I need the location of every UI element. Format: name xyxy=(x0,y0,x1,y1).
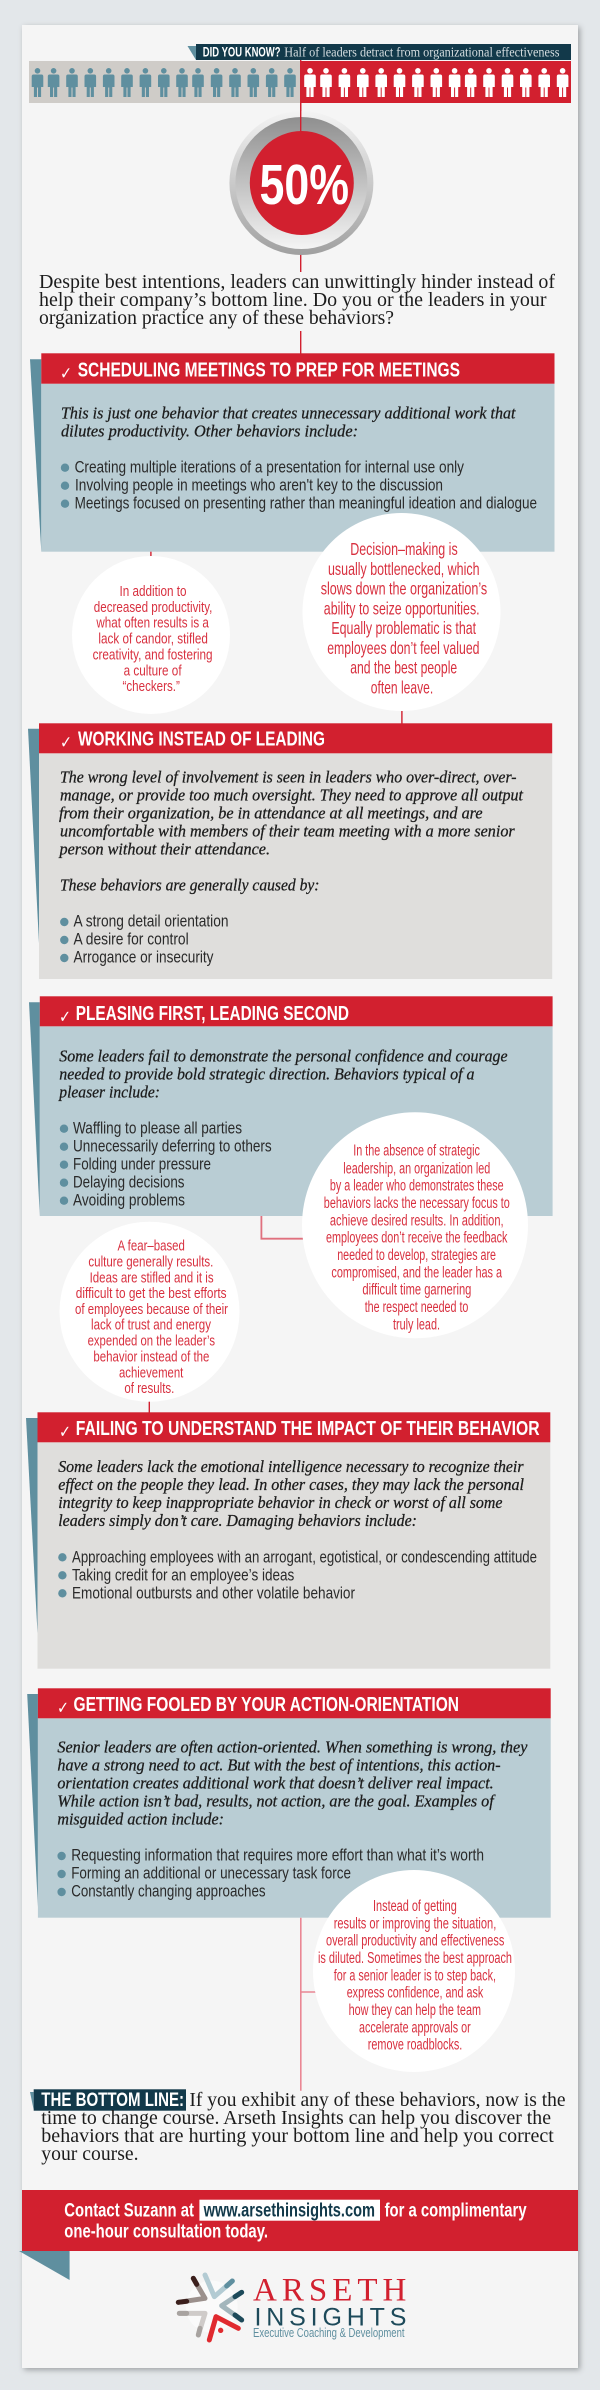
bullet list: Constantly changing approaches xyxy=(71,1883,266,1901)
contact banner: one-hour consultation today. xyxy=(64,2221,268,2242)
callout: instead of getting results xyxy=(313,1870,515,2072)
callout: absence of strategic leadership: employees don’t receive the feedback xyxy=(326,1230,508,1247)
intro text: Despite best intentions, leaders can unwittingly hinder instead of xyxy=(39,272,556,293)
people strip: half of leaders xyxy=(29,61,571,103)
bullet list: Emotional outbursts and other volatile behavior xyxy=(72,1584,355,1602)
heading: pleasing first: ✓ xyxy=(59,1008,71,1028)
connector lines xyxy=(301,1918,316,2091)
callout: decision-making xyxy=(302,513,500,711)
bullet list: Involving people in meetings who aren't key to the discussion xyxy=(75,476,443,494)
callout: absence of strategic leadership: behaviors lacks the necessary focus to xyxy=(324,1195,510,1212)
bullet list: Arrogance or insecurity xyxy=(74,949,214,967)
callout: fear-based culture: Ideas are stifled and it is xyxy=(90,1270,214,1286)
heading: action orientation: ✓ xyxy=(57,1698,69,1718)
logo wordmark: INSIGHTS xyxy=(254,2304,406,2332)
callout: fear-based culture xyxy=(60,1222,240,1402)
bullet list xyxy=(58,1548,537,1602)
callout: absence of strategic leadership: difficult time garnering xyxy=(362,1282,471,1299)
50 percent badge xyxy=(229,60,373,272)
text: involvement: uncomfortable with members of their team meeting with a more senior xyxy=(60,822,515,841)
callout: absence of strategic leadership: needed to develop, strategies are xyxy=(337,1247,496,1264)
text: action xyxy=(57,1738,528,1829)
text: intro: This is just one behavior that creates unnecessary additional work that xyxy=(61,403,517,422)
bullet list: Avoiding problems xyxy=(73,1191,185,1209)
callout: instead of getting results: Instead of getting xyxy=(373,1898,457,1915)
callout: instead of getting results: how they can help the team xyxy=(349,2002,481,2019)
bullet list: Requesting information that requires more effort than what it’s worth xyxy=(71,1847,484,1865)
logo: Arseth Insights xyxy=(178,2273,406,2340)
text: emotional intelligence xyxy=(58,1457,524,1530)
text: involvement: from their organization, be in attendance at all meetings, and are xyxy=(59,804,483,823)
text: intro: dilutes productivity. Other behaviors include: xyxy=(61,421,358,440)
bullet list: Taking credit for an employee’s ideas xyxy=(72,1566,294,1584)
heading: scheduling meetings: ✓ xyxy=(60,364,72,384)
bullet list: Creating multiple iterations of a presentation for internal use only xyxy=(75,458,465,476)
intro text: organization practice any of these behaviors? xyxy=(39,308,394,329)
bullet list xyxy=(60,1119,272,1209)
text: confidence: needed to provide bold strategic direction. Behaviors typical of a xyxy=(59,1065,475,1084)
heading: pleasing first: PLEASING FIRST, LEADING SECOND xyxy=(76,1002,349,1025)
logo mark xyxy=(178,2275,242,2340)
callout: instead of getting results: express confidence, and ask xyxy=(347,1985,483,2002)
heading: working instead of leading: WORKING INSTEAD OF LEADING xyxy=(78,727,325,750)
heading: working instead of leading: ✓ xyxy=(60,733,72,753)
callout: fear-based culture: of employees because of their xyxy=(75,1302,228,1318)
text: confidence xyxy=(58,1047,508,1102)
the bottom line xyxy=(30,2089,566,2165)
bullet list: Waffling to please all parties xyxy=(73,1119,242,1137)
callout: productivity: In addition to xyxy=(120,584,186,600)
callout: absence of strategic leadership: the respect needed to xyxy=(365,1299,468,1316)
callout: productivity: lack of candor, stifled xyxy=(98,632,208,648)
callout: decision-making: Equally problematic is that xyxy=(331,618,476,638)
heading: failing to understand xyxy=(38,1412,550,1442)
connector line xyxy=(150,552,152,558)
heading: scheduling meetings xyxy=(41,353,555,384)
callout: instead of getting results: accelerate approvals or xyxy=(359,2019,471,2036)
callout: absence of strategic leadership: by a leader who demonstrates these xyxy=(330,1178,504,1195)
callout: fear-based culture: of results. xyxy=(124,1381,174,1397)
callout: fear-based culture: achievement xyxy=(119,1365,183,1381)
callout: instead of getting results: for a senior leader is to step back, xyxy=(334,1967,496,1984)
text: confidence: Some leaders fail to demonstrate the personal confidence and courage xyxy=(59,1047,508,1066)
the bottom line: time to change course. Arseth Insights can help you discover the xyxy=(41,2108,551,2129)
heading: working instead of leading xyxy=(39,723,552,753)
banner: did you know: DID YOU KNOW? xyxy=(203,45,280,60)
callout: fear-based culture: lack of trust and energy xyxy=(91,1318,212,1334)
callout: fear-based culture: difficult to get the best efforts xyxy=(76,1286,227,1302)
callout: productivity xyxy=(72,556,230,714)
callout: fear-based culture: behavior instead of the xyxy=(93,1349,209,1365)
contact banner xyxy=(19,2190,578,2280)
callout: productivity: a culture of xyxy=(124,663,182,679)
callout: instead of getting results: overall productivity and effectiveness xyxy=(326,1933,504,1950)
50 percent badge: 50% xyxy=(260,153,349,217)
bullet list: Unnecessarily deferring to others xyxy=(73,1137,272,1155)
text: involvement: These behaviors are generally caused by: xyxy=(60,876,320,895)
callout: fear-based culture: culture generally results. xyxy=(88,1255,213,1271)
callout: decision-making: often leave. xyxy=(371,677,433,697)
connector line xyxy=(149,1402,150,1413)
callout: absence of strategic leadership xyxy=(302,1112,528,1338)
callout: productivity: what often results is a xyxy=(96,616,210,632)
callout: absence of strategic leadership: achieve desired results. In addition, xyxy=(330,1212,504,1229)
text: confidence: pleaser include: xyxy=(58,1083,160,1102)
heading: action orientation: GETTING FOOLED BY YOUR ACTION-ORIENTATION xyxy=(74,1693,459,1716)
callout: absence of strategic leadership: truly lead. xyxy=(393,1316,440,1333)
panel: scheduling meetings xyxy=(30,353,554,552)
text: emotional intelligence: Some leaders lack the emotional intelligence necessary to recognize their xyxy=(58,1457,524,1476)
text: action: have a strong need to act. But with the best of intentions, this action- xyxy=(57,1756,501,1775)
connector line xyxy=(300,331,301,354)
panel: action orientation xyxy=(27,1688,551,1918)
text: involvement: The wrong level of involvement is seen in leaders who over-direct, over- xyxy=(60,768,517,787)
bullet list xyxy=(60,913,228,967)
the bottom line: your course. xyxy=(41,2144,138,2165)
connector line xyxy=(401,711,403,724)
callout: absence of strategic leadership: leadership, an organization led xyxy=(343,1160,490,1177)
text: action: misguided action include: xyxy=(57,1810,224,1829)
bullet list xyxy=(57,1847,484,1901)
the bottom line: If you exhibit any of these behaviors, now is the xyxy=(189,2090,566,2111)
contact banner: www.arsethinsights.com xyxy=(203,2201,375,2222)
text: action: While action isn’t bad, results, not action, are the goal. Examples of xyxy=(57,1792,496,1811)
panel: failing to understand xyxy=(26,1412,550,1669)
text: involvement xyxy=(59,768,524,895)
heading: failing to understand: ✓ xyxy=(59,1422,71,1442)
bullet list: Delaying decisions xyxy=(73,1173,184,1191)
callout: productivity: decreased productivity, xyxy=(94,600,212,616)
banner: did you know: Half of leaders detract from organizational effectiveness xyxy=(284,45,560,60)
text: action: Senior leaders are often action-oriented. When something is wrong, they xyxy=(57,1738,528,1757)
bullet list: Folding under pressure xyxy=(73,1155,211,1173)
callout: absence of strategic leadership: compromised, and the leader has a xyxy=(331,1264,502,1281)
heading: action orientation xyxy=(38,1688,551,1718)
label: the bottom line: THE BOTTOM LINE: xyxy=(41,2089,184,2111)
callout: decision-making: slows down the organization’s xyxy=(321,579,487,599)
callout: decision-making: and the best people xyxy=(350,658,457,678)
callout: instead of getting results: remove roadblocks. xyxy=(368,2037,462,2054)
text: involvement: person without their attendance. xyxy=(59,840,270,859)
bullet list: A desire for control xyxy=(74,931,189,949)
text: intro xyxy=(61,403,517,440)
text: emotional intelligence: integrity to keep inappropriate behavior in check or worst of all some xyxy=(58,1493,503,1512)
banner: did you know xyxy=(188,44,571,60)
text: action: orientation creates additional work that doesn’t deliver real impact. xyxy=(57,1774,494,1793)
people: blue group xyxy=(32,68,296,97)
connector bracket xyxy=(261,1216,304,1239)
callout: decision-making: employees don’t feel valued xyxy=(327,638,480,658)
callout: decision-making: ability to seize opportunities. xyxy=(324,598,480,618)
callout: productivity: “checkers.” xyxy=(122,679,180,695)
the bottom line: behaviors that are hurting your bottom line and help you correct xyxy=(41,2126,554,2147)
panel: working instead of leading xyxy=(28,723,552,979)
intro text: help their company’s bottom line. Do you or the leaders in your xyxy=(39,290,547,311)
contact banner: for a complimentary xyxy=(385,2201,527,2222)
callout: instead of getting results: results or improving the situation, xyxy=(334,1915,496,1932)
callout: decision-making: Decision–making is xyxy=(350,539,458,559)
callout: productivity: creativity, and fostering xyxy=(93,647,213,663)
text: involvement: manage, or provide too much oversight. They need to approve all output xyxy=(60,786,524,805)
heading: pleasing first xyxy=(40,996,553,1028)
logo wordmark xyxy=(253,2273,406,2340)
text: emotional intelligence: leaders simply don’t care. Damaging behaviors include: xyxy=(58,1511,417,1530)
callout: decision-making: usually bottlenecked, which xyxy=(328,559,480,579)
logo wordmark: ARSETH xyxy=(253,2273,406,2309)
logo wordmark: Executive Coaching & Development xyxy=(253,2326,405,2340)
bullet list xyxy=(61,458,537,512)
bullet list: Forming an additional or unecessary task force xyxy=(71,1865,351,1883)
text: emotional intelligence: effect on the people they lead. In other cases, they may lack the personal xyxy=(58,1475,524,1494)
callout: fear-based culture: A fear–based xyxy=(118,1239,185,1255)
people: white group xyxy=(304,68,568,97)
bullet list: A strong detail orientation xyxy=(74,913,228,931)
callout: absence of strategic leadership: In the absence of strategic xyxy=(353,1143,480,1160)
heading: scheduling meetings: SCHEDULING MEETINGS TO PREP FOR MEETINGS xyxy=(78,359,460,382)
callout: instead of getting results: is diluted. Sometimes the best approach xyxy=(318,1950,512,1967)
panel: pleasing first xyxy=(29,996,553,1216)
callout: fear-based culture: expended on the leader’s xyxy=(88,1334,215,1350)
contact banner: Contact Suzann at xyxy=(64,2201,195,2222)
intro text xyxy=(39,272,556,329)
